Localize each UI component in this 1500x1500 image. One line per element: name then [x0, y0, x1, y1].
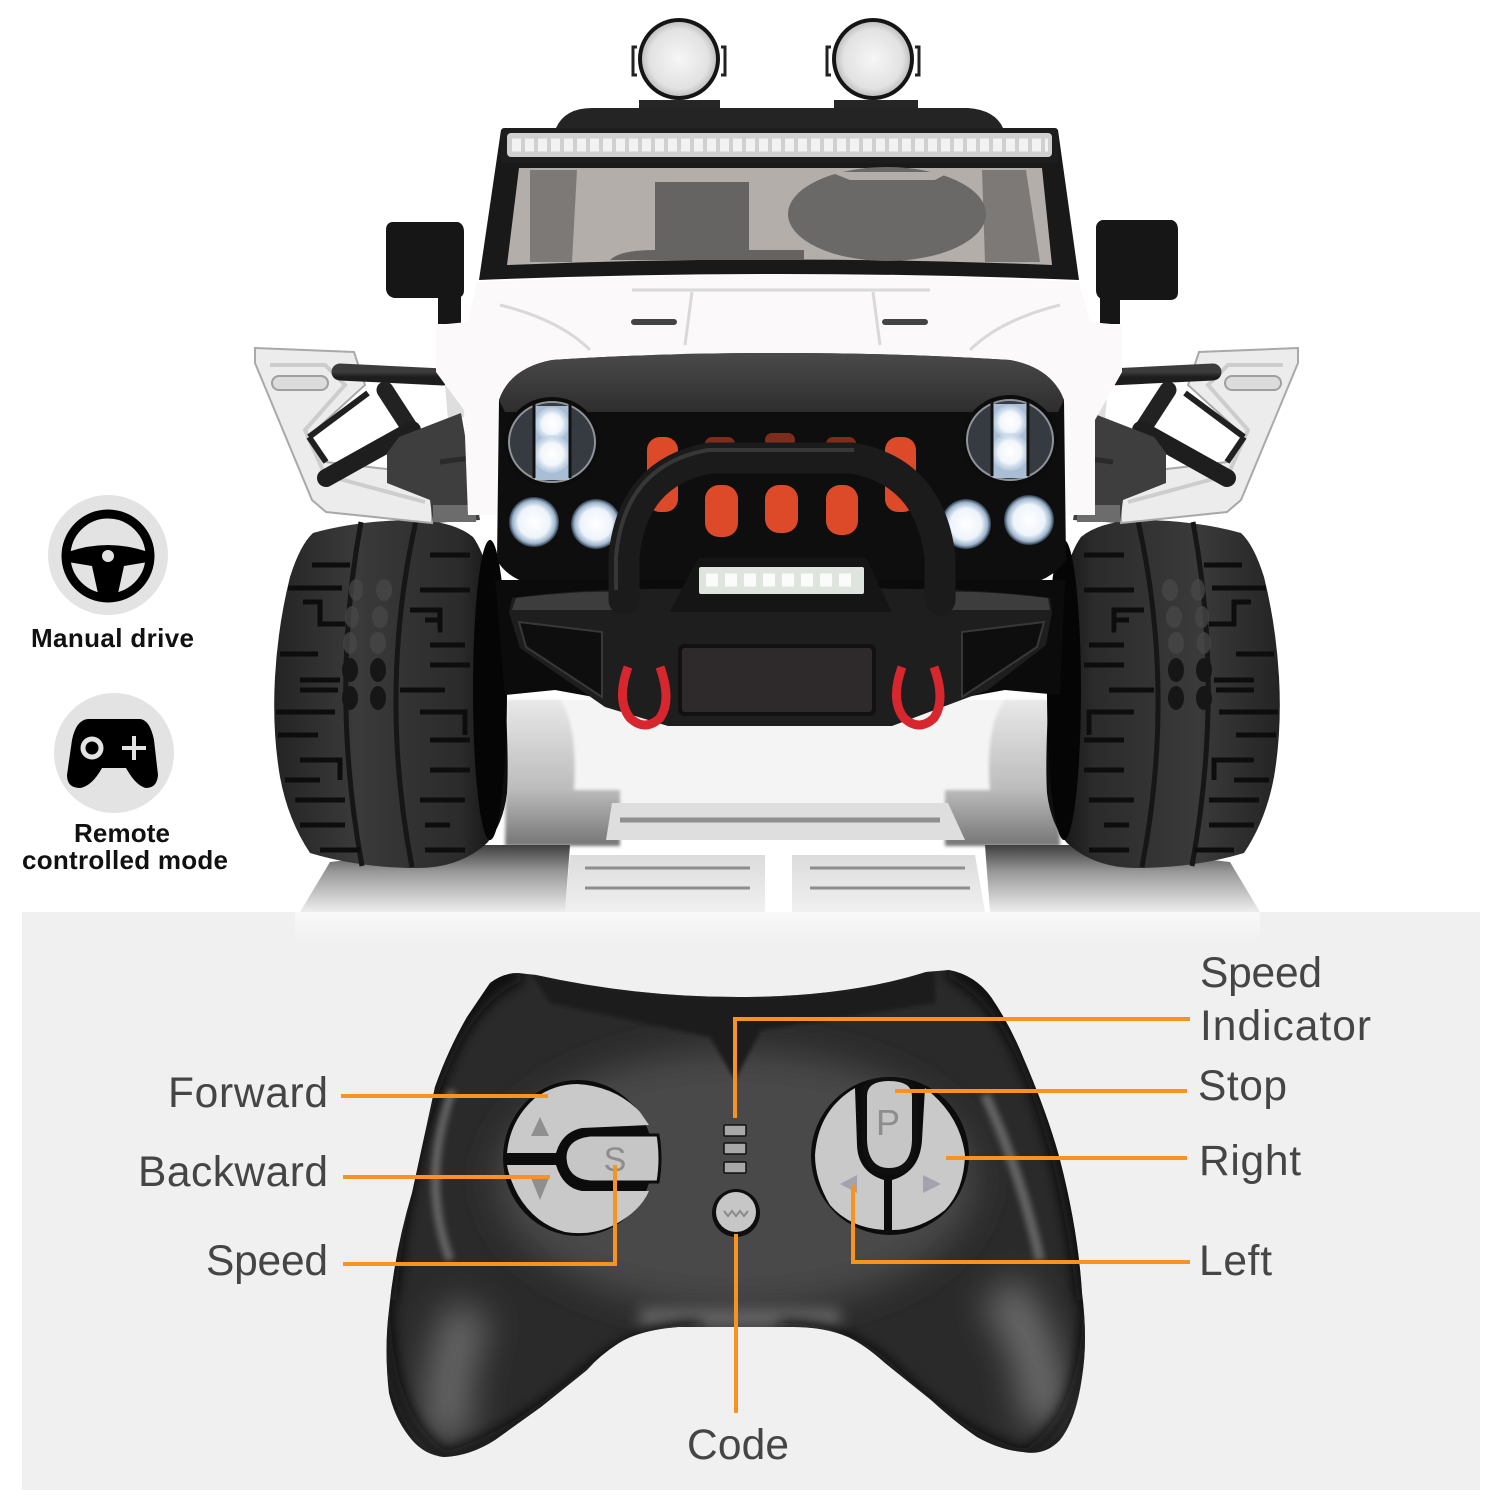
windshield frame and glass — [479, 130, 1079, 280]
open doors and fenders — [255, 348, 1298, 523]
label: remote controlled mode: controlled mode — [22, 845, 228, 875]
roof lamps — [633, 18, 919, 124]
icon: steering wheel — [48, 495, 168, 615]
roof bar — [556, 108, 1003, 128]
wheels — [274, 520, 1280, 868]
callout labels: Stop — [1198, 1063, 1287, 1110]
callout labels: Backward — [138, 1149, 328, 1196]
callout labels: Code — [687, 1422, 789, 1469]
callout labels: Speed — [1200, 950, 1322, 997]
bumper LED bar — [670, 558, 892, 612]
illustration: remote controller — [380, 960, 1100, 1470]
grille slots — [647, 437, 916, 537]
callout labels: Forward — [168, 1070, 328, 1117]
red tow hooks — [622, 667, 940, 725]
headlights — [504, 395, 1058, 549]
label: manual drive: Manual drive — [31, 623, 194, 653]
under-body chassis — [495, 580, 1065, 700]
callout labels: Left — [1199, 1238, 1272, 1285]
callout labels: Indicator — [1200, 1003, 1371, 1050]
panel background — [22, 912, 1480, 1490]
front bumper — [509, 589, 1052, 726]
side mirrors — [386, 220, 1178, 324]
right button cluster — [811, 1077, 969, 1235]
icon: gamepad — [54, 693, 174, 813]
callout labels — [138, 950, 1371, 1469]
feature: remote controlled mode — [22, 693, 228, 875]
label: remote controlled mode: Remote — [74, 818, 170, 848]
callout lines — [341, 1019, 1190, 1413]
illustration: ride-on jeep front view — [255, 18, 1298, 912]
callout labels: Speed — [206, 1238, 328, 1285]
left button cluster — [503, 1080, 660, 1236]
ground reflection — [300, 700, 1260, 912]
LED light bar — [501, 128, 1058, 163]
controller body — [380, 960, 1100, 1470]
left button cluster: S — [604, 1141, 626, 1179]
front grille — [497, 353, 1066, 590]
right button cluster: P — [876, 1102, 900, 1143]
callout labels: Right — [1199, 1138, 1301, 1185]
hood — [436, 275, 1122, 515]
code button — [712, 1189, 760, 1237]
label: remote controlled mode — [22, 818, 228, 875]
speed indicator lights — [724, 1125, 746, 1173]
panel: remote control diagram — [22, 912, 1480, 1490]
feature: manual drive — [31, 495, 194, 653]
bull bar — [616, 450, 940, 600]
